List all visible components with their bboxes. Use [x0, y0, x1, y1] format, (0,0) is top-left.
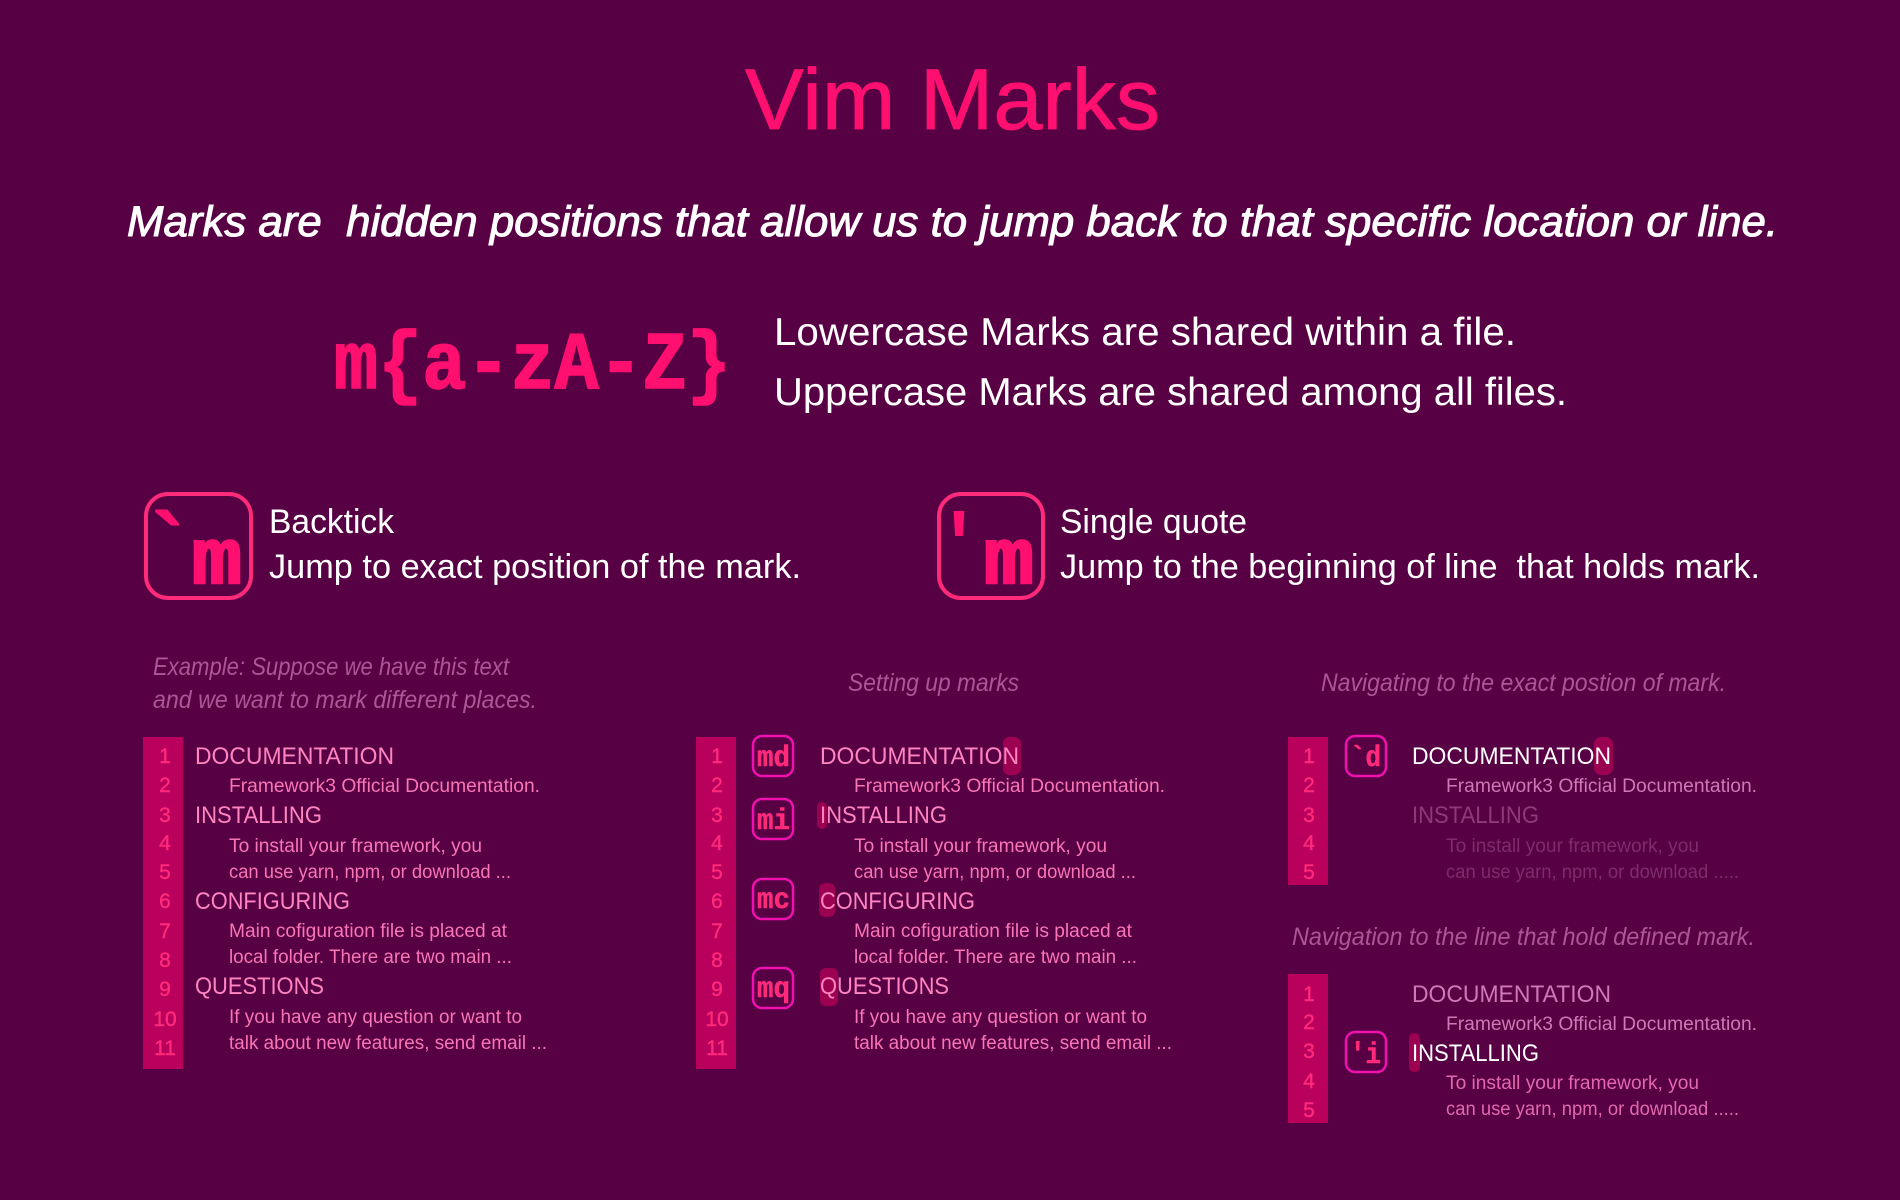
icon: backtick m key: ` [139, 496, 197, 631]
document text: To install your framework, you [854, 836, 1107, 857]
document text: can use yarn, npm, or download ... [229, 862, 511, 883]
document text: Framework3 Official Documentation. [1446, 776, 1757, 797]
line number gutter: 5 [1303, 861, 1315, 884]
exact position caption: Navigating to the exact postion of mark. [1321, 669, 1726, 697]
line number gutter: 5 [711, 861, 723, 884]
document text: To install your framework, you [1446, 836, 1699, 857]
setting up caption: Setting up marks [848, 669, 1019, 697]
line number gutter: 6 [711, 890, 723, 913]
document text: If you have any question or want to [229, 1007, 522, 1028]
document text: To install your framework, you [1446, 1073, 1699, 1094]
line number gutter: 10 [705, 1008, 729, 1031]
line number gutter [143, 737, 183, 1069]
single quote description: Single quote [1060, 503, 1247, 541]
line number gutter: 1 [1303, 745, 1315, 768]
document text [820, 743, 1172, 1054]
document text: Framework3 Official Documentation. [229, 776, 540, 797]
line number gutter: 3 [711, 804, 723, 827]
line number gutter: 7 [711, 920, 723, 943]
document text: QUESTIONS [195, 973, 324, 1000]
line number gutter: 5 [159, 861, 171, 884]
document text: INSTALLING [820, 802, 947, 829]
document text: Main cofiguration file is placed at [854, 921, 1133, 942]
line number gutter: 9 [711, 978, 723, 1001]
line number gutter: 8 [159, 949, 171, 972]
line number gutter: 3 [1303, 1040, 1315, 1063]
line number gutter: 7 [159, 920, 171, 943]
single quote description: Jump to the beginning of line that holds mark. [1060, 548, 1760, 586]
document text: INSTALLING [1412, 802, 1539, 829]
backtick description [269, 503, 801, 586]
line number gutter: 4 [711, 832, 723, 855]
mark scope description: Uppercase Marks are shared among all files. [774, 371, 1567, 414]
icon: mq key: mq [757, 973, 790, 1007]
mark scope description [774, 311, 1567, 414]
subtitle: Marks are hidden positions that allow us to jump back to that specific location or line. [127, 198, 1778, 246]
icon: single quote m key: ' [935, 503, 983, 594]
line number gutter: 5 [1303, 1099, 1315, 1122]
line number gutter: 8 [711, 949, 723, 972]
line number gutter: 2 [1303, 774, 1315, 797]
document text: To install your framework, you [229, 836, 482, 857]
line number gutter: 10 [153, 1008, 177, 1031]
example caption: and we want to mark different places. [153, 686, 537, 714]
icon: mi key: mi [757, 805, 790, 839]
line number gutter: 1 [1303, 983, 1315, 1006]
line number gutter [696, 737, 736, 1069]
backtick description: Backtick [269, 503, 395, 541]
icon: backtick d key: `d [1350, 742, 1381, 776]
line number gutter: 2 [711, 774, 723, 797]
panel: setting up marks [696, 669, 1172, 1069]
mark scope description: Lowercase Marks are shared within a file. [774, 311, 1516, 354]
document text: can use yarn, npm, or download ..... [1446, 1099, 1739, 1120]
document text: QUESTIONS [820, 973, 949, 1000]
document text: Main cofiguration file is placed at [229, 921, 508, 942]
document text: Framework3 Official Documentation. [854, 776, 1165, 797]
document text: can use yarn, npm, or download ... [854, 862, 1136, 883]
line number gutter: 4 [159, 832, 171, 855]
line number gutter: 11 [706, 1037, 728, 1060]
icon: md key: md [757, 742, 790, 776]
document text: INSTALLING [1412, 1040, 1539, 1067]
line number gutter: 3 [1303, 804, 1315, 827]
mark position highlight [1409, 1033, 1420, 1072]
document text: Framework3 Official Documentation. [1446, 1014, 1757, 1035]
document text: local folder. There are two main ... [854, 947, 1137, 968]
icon: single quote m key [935, 494, 1043, 607]
line number gutter: 3 [159, 804, 171, 827]
document text: INSTALLING [195, 802, 322, 829]
title: Vim Marks [745, 52, 1160, 148]
document text: DOCUMENTATION [1412, 981, 1611, 1008]
document text: DOCUMENTATION [1412, 743, 1611, 770]
line number gutter: 2 [1303, 1011, 1315, 1034]
document text: DOCUMENTATION [820, 743, 1019, 770]
icon: mc key: mc [757, 884, 790, 918]
document text: can use yarn, npm, or download ..... [1446, 862, 1739, 883]
document text [1412, 743, 1757, 883]
example caption: Example: Suppose we have this text [153, 653, 510, 681]
document text [1412, 981, 1757, 1120]
document text: CONFIGURING [195, 888, 350, 915]
line number gutter: 1 [711, 745, 723, 768]
icon: single quote m key: m [984, 517, 1034, 607]
panel: example text [143, 653, 547, 1069]
line number gutter: 1 [159, 745, 171, 768]
line number gutter: 4 [1303, 1070, 1315, 1093]
line number gutter: 6 [159, 890, 171, 913]
line number gutter: 4 [1303, 832, 1315, 855]
document text: talk about new features, send email ... [229, 1033, 547, 1054]
document text: DOCUMENTATION [195, 743, 394, 770]
icon: backtick m key [139, 494, 251, 631]
document text: If you have any question or want to [854, 1007, 1147, 1028]
backtick description: Jump to exact position of the mark. [269, 548, 801, 586]
line number gutter: 11 [154, 1037, 176, 1060]
mark position highlights [817, 737, 1021, 1006]
mark command syntax: m{a-zA-Z} [334, 320, 731, 413]
line navigation caption: Navigation to the line that hold defined mark. [1292, 923, 1755, 951]
panel: navigating to line [1288, 923, 1757, 1123]
panel: navigating to exact position [1288, 669, 1757, 885]
single quote description [1060, 503, 1760, 586]
document text [195, 743, 547, 1054]
mark position highlight [1594, 737, 1613, 775]
example caption [153, 653, 537, 714]
line number gutter [1288, 737, 1328, 885]
document text: talk about new features, send email ... [854, 1033, 1172, 1054]
icon: backtick m key: m [192, 517, 242, 607]
line number gutter: 2 [159, 774, 171, 797]
document text: CONFIGURING [820, 888, 975, 915]
icon: single quote i key: 'i [1350, 1039, 1381, 1073]
document text: local folder. There are two main ... [229, 947, 512, 968]
line number gutter: 9 [159, 978, 171, 1001]
line number gutter [1288, 974, 1328, 1123]
